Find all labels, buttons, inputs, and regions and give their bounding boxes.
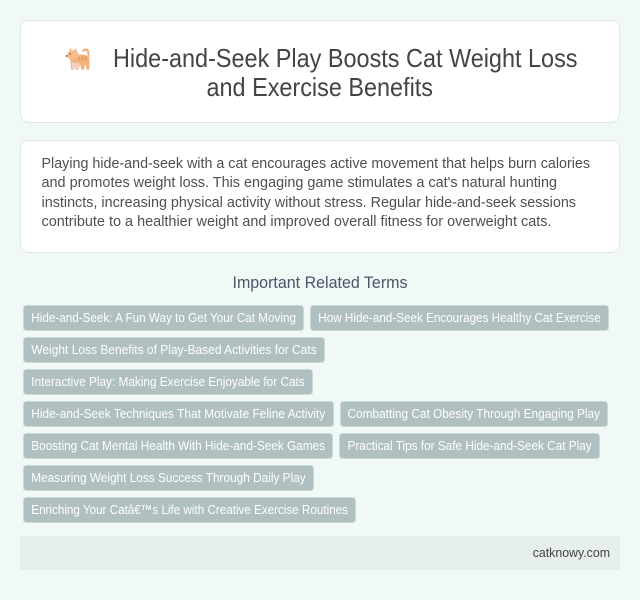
- panel: title card: [20, 20, 620, 122]
- tag: Interactive Play: Making Exercise Enjoyable for Cats: [31, 374, 305, 389]
- tag: [24, 434, 332, 458]
- icon: orange cat: [66, 48, 90, 70]
- tag: [310, 306, 608, 330]
- tag: [24, 306, 304, 330]
- tag: How Hide-and-Seek Encourages Healthy Cat Exercise: [318, 310, 601, 325]
- tag: Weight Loss Benefits of Play-Based Activities for Cats: [31, 342, 317, 357]
- description line 3: instincts, increasing physical activity without stress. Regular hide-and-seek sessions: [42, 194, 576, 211]
- panel: description card: [20, 140, 620, 252]
- title line 2: and Exercise Benefits: [206, 74, 433, 102]
- tag: Combatting Cat Obesity Through Engaging Play: [348, 406, 601, 421]
- tag: Practical Tips for Safe Hide-and-Seek Cat Play: [348, 438, 592, 453]
- tag: Enriching Your Catâ€™s Life with Creative Exercise Routines: [31, 502, 348, 517]
- tag: Measuring Weight Loss Success Through Daily Play: [31, 470, 306, 485]
- heading: important related terms: Important Related Terms: [232, 273, 408, 292]
- tag: Hide-and-Seek Techniques That Motivate Feline Activity: [31, 406, 326, 421]
- tag: [24, 498, 356, 522]
- tag: Boosting Cat Mental Health With Hide-and-Seek Games: [31, 438, 325, 453]
- panel: related term tags: [24, 306, 608, 522]
- tag: Hide-and-Seek: A Fun Way to Get Your Cat Moving: [31, 310, 296, 325]
- footer site name: catknowy.com: [533, 545, 610, 560]
- title line 1: Hide-and-Seek Play Boosts Cat Weight Loss: [113, 45, 578, 73]
- tag: [340, 402, 608, 426]
- footer bar: [20, 536, 620, 570]
- description line 4: contribute to a healthier weight and improved overall fitness for overweight cats.: [42, 213, 552, 230]
- tag: [24, 338, 324, 362]
- tag: [24, 402, 334, 426]
- tag: [340, 434, 600, 458]
- tag: [24, 466, 314, 490]
- tag: [24, 370, 312, 394]
- description line 1: Playing hide-and-seek with a cat encourages active movement that helps burn calories: [42, 155, 590, 172]
- description line 2: and promotes weight loss. This engaging game stimulates a cat's natural hunting: [42, 174, 557, 191]
